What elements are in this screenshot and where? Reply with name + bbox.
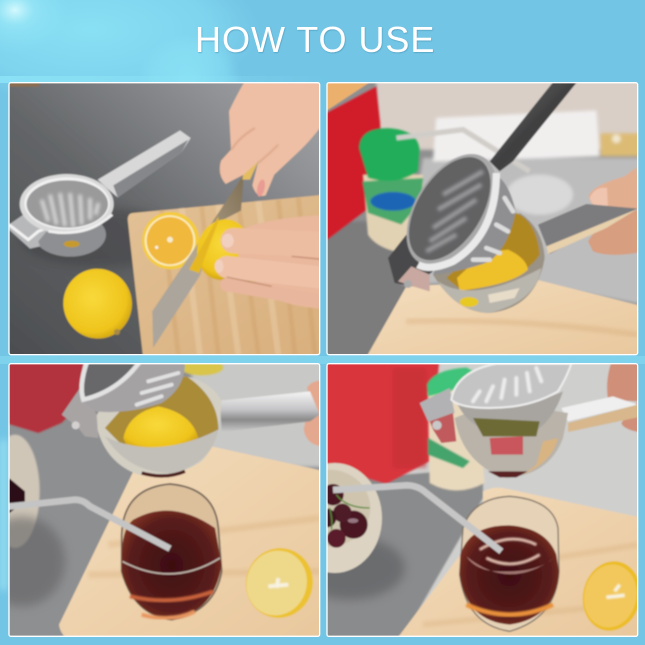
- bowl of cherries: [328, 462, 407, 602]
- green jar: [359, 128, 423, 253]
- title: HOW TO USE: [195, 19, 435, 60]
- panel: press the lemon: [323, 78, 643, 360]
- press bowl: [388, 78, 580, 291]
- whole lemon: [62, 268, 134, 340]
- lower bowl: [433, 213, 545, 313]
- hand: [303, 380, 319, 446]
- hand and thumb: [588, 167, 643, 255]
- lemon half: [245, 547, 314, 619]
- hand: [606, 364, 637, 432]
- blurred backdrop: [323, 78, 643, 360]
- panel: slice the lemon: [5, 78, 325, 360]
- glass of juice: [460, 496, 559, 631]
- press bowl: [62, 358, 185, 438]
- right handle: [561, 396, 638, 432]
- straw: [333, 485, 501, 551]
- wood table: [59, 446, 325, 643]
- lemon half: [582, 560, 637, 632]
- juicer: [9, 130, 191, 257]
- lower bowl: [95, 376, 222, 476]
- knife: [152, 161, 258, 347]
- cutting board: [128, 195, 325, 360]
- upper hand: [220, 78, 325, 197]
- yellow background object: [184, 364, 224, 377]
- red box: [10, 364, 84, 434]
- right handle: [538, 204, 638, 254]
- press bowl: [420, 364, 571, 443]
- straw: [396, 130, 530, 171]
- lower bowl: [455, 408, 568, 478]
- red box: [328, 83, 382, 241]
- panel: juice into glass: [0, 358, 325, 643]
- right handle: [220, 391, 320, 432]
- lower hand: [215, 215, 325, 309]
- lemon being cut: [188, 216, 244, 281]
- jar: [427, 367, 485, 490]
- bowl of cherries: [0, 435, 65, 606]
- lemon half: [142, 212, 199, 269]
- panel: stir and serve: [326, 363, 638, 637]
- red box: [323, 358, 440, 484]
- straw: [5, 500, 170, 549]
- wood table: [394, 488, 643, 643]
- glass of juice: [122, 484, 222, 620]
- wood table: [367, 280, 637, 354]
